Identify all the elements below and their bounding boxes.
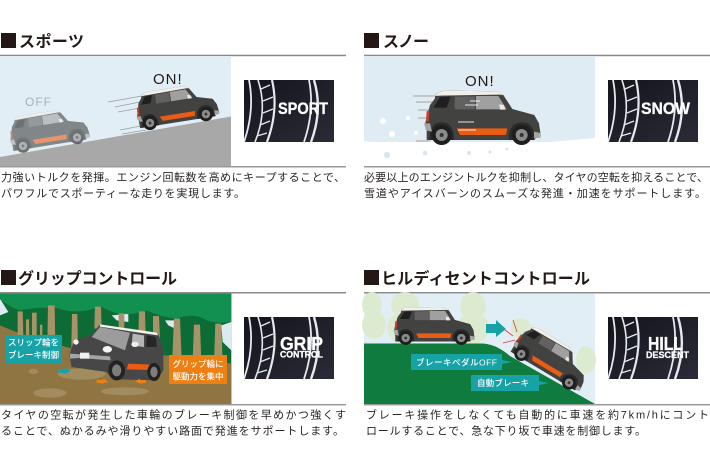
- panel: sport: [0, 33, 346, 200]
- car: [424, 91, 541, 145]
- illustration: forest and car: [0, 294, 231, 404]
- description: snow: 必要以上のエンジントルクを抑制し、タイヤの空転を抑えることで、: [364, 170, 708, 184]
- callout: slip wheel: [5, 335, 62, 363]
- description: hill descent: [366, 408, 709, 438]
- illustration: hill descent: [362, 292, 596, 404]
- description: sport: [1, 170, 345, 200]
- car: descending: [507, 321, 596, 395]
- description: grip control: ることで、ぬかるみや滑りやすい路面で発進をサポートします。: [1, 424, 344, 438]
- badge: grip control: [244, 317, 334, 379]
- badge: snow: SNOW: [641, 99, 691, 118]
- sky gaps: [0, 299, 231, 350]
- speed streaks on car: [458, 101, 480, 130]
- brake marks: [503, 320, 517, 343]
- badge: sport: [244, 80, 334, 142]
- badge: hill descent: DESCENT: [646, 350, 689, 360]
- badge: sport: SPORT: [278, 99, 329, 118]
- callout: auto brake: [471, 375, 549, 391]
- car: off: [6, 105, 91, 155]
- badge: hill descent: [608, 317, 698, 379]
- speed lines: [413, 96, 440, 141]
- badge: grip control: GRIP: [280, 334, 323, 354]
- callout: brake pedal off: [411, 354, 512, 370]
- label: on: ON!: [465, 73, 495, 90]
- car: on: [133, 81, 220, 132]
- description: snow: [364, 170, 708, 200]
- callout: brake pedal off: ブレーキペダルOFF: [416, 358, 497, 368]
- panel: snow: [364, 33, 710, 200]
- heading: sport: スポーツ: [19, 33, 84, 51]
- description: grip control: [1, 408, 346, 438]
- panel: hill descent control: [362, 269, 710, 438]
- badge: snow: [608, 80, 698, 142]
- callout: grip wheel: 駆動力を集中: [172, 372, 224, 382]
- heading: snow: [364, 33, 429, 51]
- background trees: [362, 292, 596, 374]
- speed lines: [108, 96, 146, 134]
- car: front three-quarter: [69, 324, 163, 381]
- description: sport: 力強いトルクを発揮。エンジン回転数を高めにキープすることで、: [1, 170, 345, 184]
- callout: grip wheel: [169, 355, 227, 384]
- label: off: OFF: [25, 95, 52, 109]
- callout: slip wheel: ブレーキ制御: [8, 350, 59, 360]
- heading: snow: スノー: [383, 34, 429, 51]
- arrows: [58, 367, 71, 374]
- snowflakes: [380, 116, 418, 137]
- description: sport: パワフルでスポーティーな走りを実現します。: [1, 187, 245, 200]
- illustration: car on snow: [364, 56, 595, 158]
- ground: [0, 325, 231, 404]
- description: grip control: タイヤの空転が発生した車輪のブレーキ制御を早めかつ強くす: [1, 408, 346, 422]
- panel: grip control: [0, 269, 346, 438]
- tree trunks: [18, 305, 223, 364]
- heading: hill descent control: ヒルディセントコントロール: [381, 269, 590, 288]
- callout: auto brake: 自動ブレーキ: [477, 378, 529, 388]
- label: on: ON!: [153, 71, 183, 88]
- badge: hill descent: HILL: [648, 334, 683, 354]
- illustration: car on slope: [0, 56, 231, 166]
- heading: grip control: グリップコントロール: [18, 269, 177, 288]
- callout: grip wheel: グリップ輪に: [172, 359, 224, 369]
- hill: [364, 343, 595, 404]
- car: on flat: [393, 307, 475, 345]
- arrow: [486, 320, 506, 337]
- description: hill descent: ブレーキ操作をしなくても自動的に車速を約7km/hにコント: [366, 408, 709, 422]
- badge: grip control: CONTROL: [280, 350, 323, 360]
- mud patches: [29, 368, 149, 398]
- description: snow: 雪道やアイスバーンのスムーズな発進・加速をサポートします。: [364, 186, 706, 200]
- description: hill descent: ロールすることで、急な下り坂で車速を制御します。: [366, 424, 646, 438]
- callout: slip wheel: スリップ輪を: [8, 338, 59, 348]
